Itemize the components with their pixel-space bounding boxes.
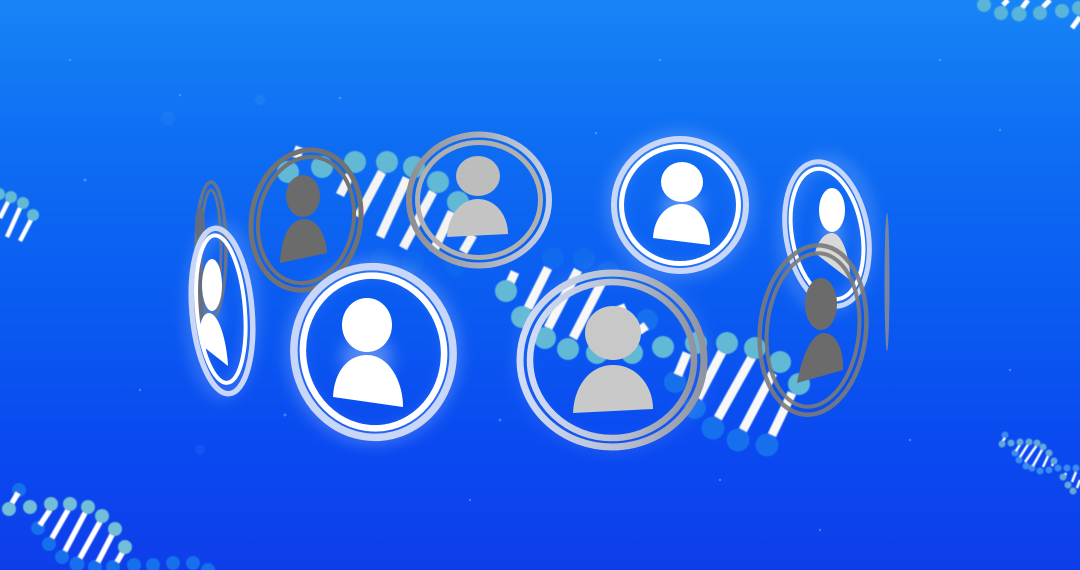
profile icon: far left, back side xyxy=(193,182,226,320)
DNA strand: left edge xyxy=(0,188,39,241)
profile icon: white right xyxy=(774,155,880,313)
DNA strand: bottom left corner xyxy=(2,483,215,570)
profile icon: light grey large front centre xyxy=(520,273,704,447)
profile icon: left edge-on white xyxy=(185,226,259,396)
DNA strand: centre upper segment xyxy=(277,147,501,276)
DNA strand: right edge xyxy=(998,432,1080,494)
background particles xyxy=(69,59,1011,531)
soft white glow behind bright profile icons xyxy=(192,138,869,447)
profile icon: white top right xyxy=(614,139,746,271)
DNA strand: top right corner xyxy=(977,0,1080,28)
profile icon: light grey top centre xyxy=(409,134,549,266)
glow behind bright figures xyxy=(202,190,842,382)
profile icon: dark grey right xyxy=(751,240,875,420)
DNA strand: centre lower segment xyxy=(495,247,810,456)
profile icon: dark grey upper left xyxy=(240,141,372,299)
profile icon: white large front left xyxy=(283,256,464,448)
profile icon: far right sliver xyxy=(884,213,890,351)
